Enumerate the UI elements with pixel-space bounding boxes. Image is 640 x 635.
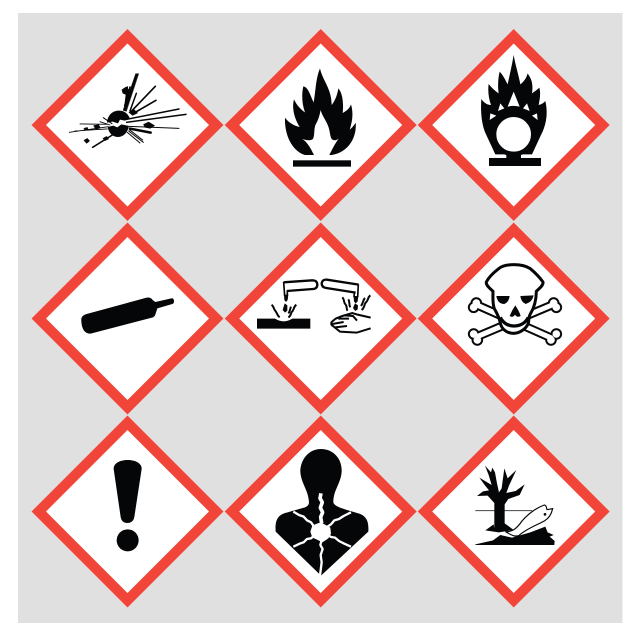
panel: oxidising bbox=[418, 29, 610, 221]
ground bbox=[475, 527, 555, 545]
fish bbox=[505, 505, 553, 536]
diamond border bbox=[32, 29, 224, 221]
diamond border bbox=[418, 29, 610, 221]
chest star cracks bbox=[293, 493, 351, 576]
diamond border bbox=[225, 222, 417, 414]
panel: gas under pressure bbox=[32, 222, 224, 414]
eyes and nose bbox=[496, 295, 534, 317]
water line bbox=[475, 509, 532, 512]
ring bbox=[494, 115, 533, 154]
icon: corrosion on metal and hand bbox=[257, 280, 371, 333]
metal bar bbox=[257, 319, 310, 329]
diamond border bbox=[32, 416, 224, 608]
panel: environmental hazard bbox=[418, 416, 610, 608]
dead tree bbox=[477, 466, 525, 532]
jaw bbox=[500, 317, 528, 326]
right test tube bbox=[322, 280, 359, 293]
icon: gas cylinder bbox=[81, 298, 174, 334]
icon: dead tree and fish bbox=[475, 466, 555, 545]
left test tube bbox=[284, 280, 317, 291]
diamond border bbox=[32, 222, 224, 414]
ground line bbox=[293, 160, 351, 167]
icon: flame over circle bbox=[481, 55, 547, 166]
ground line bbox=[489, 158, 541, 166]
hand bbox=[331, 313, 371, 333]
panel: acute toxicity bbox=[418, 222, 610, 414]
diamond border bbox=[418, 416, 610, 608]
fumes bbox=[272, 295, 370, 317]
diamond border bbox=[418, 222, 610, 414]
panel: health hazard bbox=[225, 416, 417, 608]
icon: flame over line bbox=[285, 68, 356, 167]
panel: flammable bbox=[225, 29, 417, 221]
icon: person with damaged chest bbox=[276, 449, 368, 576]
crossbones bbox=[468, 297, 562, 346]
panel: harmful irritant bbox=[32, 416, 224, 608]
skull bbox=[486, 265, 543, 333]
icon: exploding bomb bbox=[69, 74, 186, 147]
diamond border bbox=[225, 29, 417, 221]
panel: corrosive bbox=[225, 222, 417, 414]
panel: explosive bbox=[32, 29, 224, 221]
diamond border bbox=[225, 416, 417, 608]
icon: skull and crossbones bbox=[468, 265, 562, 346]
icon: exclamation mark bbox=[114, 460, 142, 551]
